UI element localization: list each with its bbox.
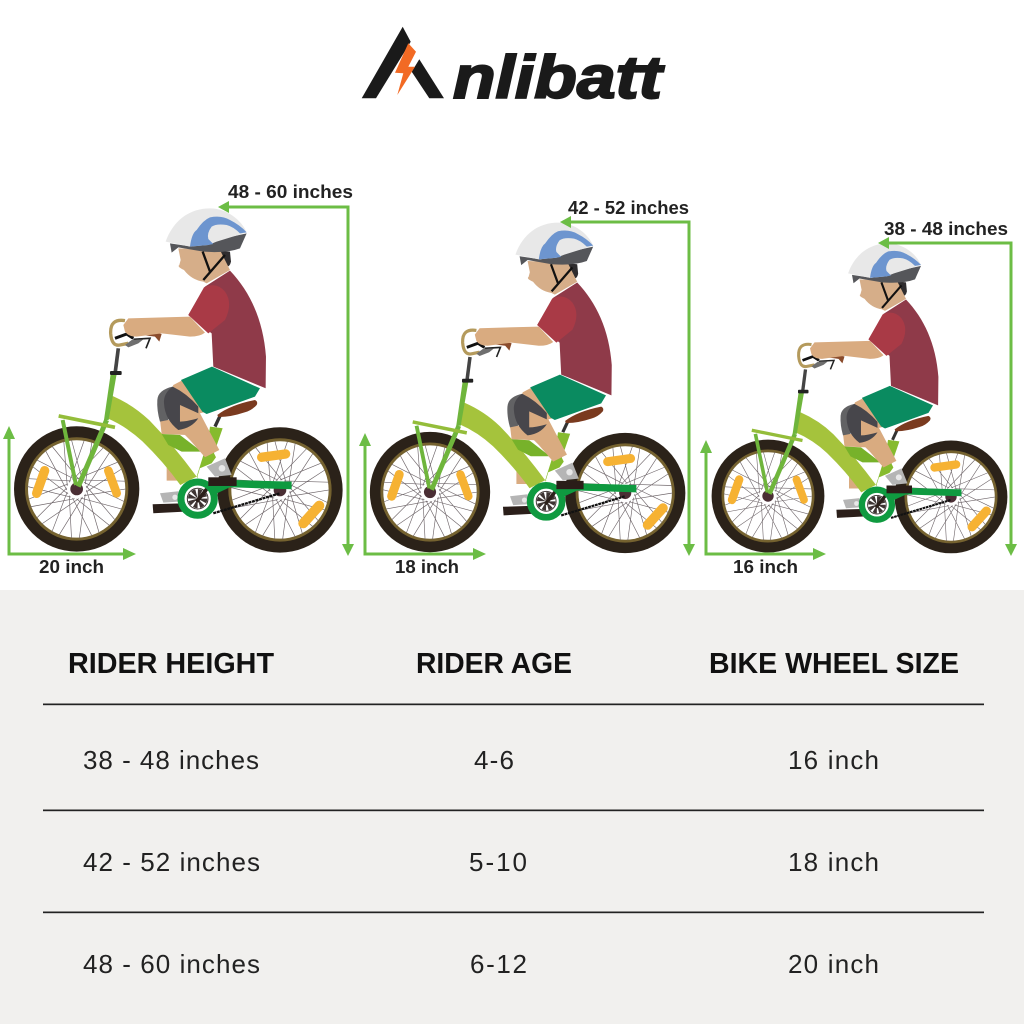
label: 18 inch: 18 inch bbox=[395, 557, 459, 577]
label: 48 - 60 inches: 48 - 60 inches bbox=[228, 182, 353, 202]
table background panel bbox=[0, 590, 1024, 1024]
logo lightning bolt bbox=[395, 43, 416, 95]
label: 20 inch: 20 inch bbox=[39, 557, 104, 577]
table heading: rider age: RIDER AGE bbox=[416, 648, 572, 680]
row 2: age 5-10: 5-10 bbox=[469, 847, 527, 877]
row 1: age 4-6: 4-6 bbox=[474, 745, 514, 775]
label: 16 inch: 16 inch bbox=[733, 557, 798, 577]
wheel arrow: 16 inch bbox=[700, 440, 826, 560]
wheel arrow: 18 inch bbox=[359, 433, 486, 560]
logo wordmark: nlibatt bbox=[453, 44, 665, 111]
bike figure: 16 inch bbox=[712, 243, 1007, 553]
height arrow: 38-48 bbox=[878, 237, 1017, 556]
bike figure: 20 inch bbox=[14, 208, 343, 553]
row 3: age 6-12: 6-12 bbox=[470, 949, 527, 979]
row 2: 18 inch: 18 inch bbox=[788, 847, 879, 877]
row 3: 20 inch: 20 inch bbox=[788, 949, 879, 979]
logo: Anlibatt bbox=[362, 27, 665, 111]
label: 38 - 48 inches: 38 - 48 inches bbox=[884, 219, 1008, 239]
table heading: bike wheel size: BIKE WHEEL SIZE bbox=[709, 648, 959, 680]
label: 42 - 52 inches: 42 - 52 inches bbox=[568, 198, 689, 218]
logo letter A mark bbox=[362, 27, 444, 98]
height arrow: 42-52 bbox=[560, 216, 695, 556]
row 1: 16 inch: 16 inch bbox=[788, 745, 879, 775]
wheel arrow: 20 inch bbox=[3, 426, 136, 560]
height arrow: 48-60 bbox=[218, 201, 354, 556]
row 1: 38 - 48 inches: 38 - 48 inches bbox=[83, 745, 259, 775]
row 2: 42 - 52 inches: 42 - 52 inches bbox=[83, 847, 260, 877]
bike figure: 18 inch bbox=[370, 223, 685, 553]
table heading: rider height: RIDER HEIGHT bbox=[68, 648, 274, 680]
row 3: 48 - 60 inches: 48 - 60 inches bbox=[83, 949, 260, 979]
